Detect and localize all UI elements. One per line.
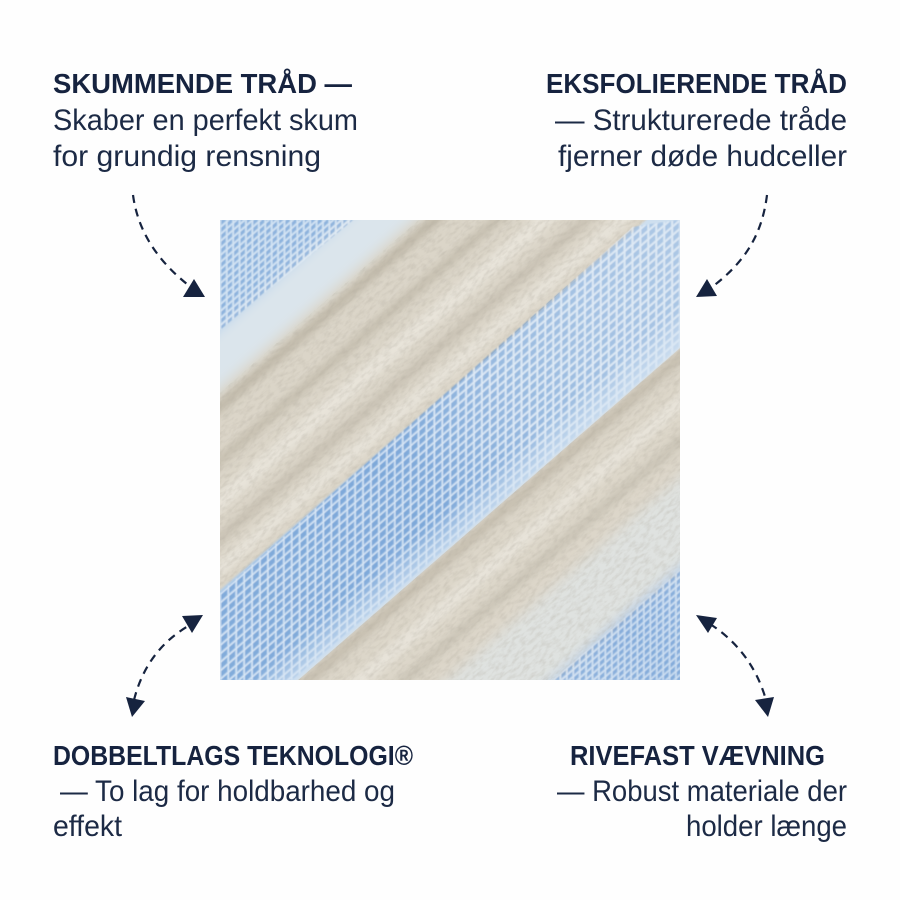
mesh grid: top-left band [220,220,353,330]
heading block: eksfolierende tråd: fjerner døde hudceller [558,140,847,173]
knit texture: lower tan band [299,362,680,680]
fabric close-up photo panel [220,220,680,680]
heading block: skummende tråd: Skaber en perfekt skum [53,104,358,137]
heading block: dobbeltlags teknologi: — To lag for holdbarhed og [60,775,395,808]
heading block: eksfolierende tråd: — Strukturerede tråde [555,104,847,137]
heading block: skummende tråd: for grundig rensning [53,140,321,173]
heading block: dobbeltlags teknologi [53,740,413,843]
arrow: top right [696,195,767,297]
mesh grid: bottom-right band [553,570,680,680]
arrow: bottom left double-headed [126,615,203,717]
pale lower edge of centre mesh [261,318,680,680]
heading block: rivefast vævning [557,740,847,843]
mesh grid: centre band [220,220,680,680]
heading block: dobbeltlags teknologi: DOBBELTLAGS TEKNOLOGI® [53,740,413,771]
arrow: bottom right double-headed [696,615,774,717]
heading block: eksfolierende tråd [546,68,847,173]
heading block: eksfolierende tråd: EKSFOLIERENDE TRÅD [546,68,847,99]
heading block: rivefast vævning: RIVEFAST VÆVNING [570,740,825,771]
arrow: top left [133,195,205,297]
heading block: skummende tråd [53,68,358,173]
knit texture: upper tan band [220,220,642,585]
pale wash over upper-right mesh [468,220,679,450]
heading block: rivefast vævning: holder længe [686,810,847,843]
heading block: rivefast vævning: — Robust materiale der [557,775,847,808]
heading block: dobbeltlags teknologi: effekt [53,810,123,843]
heading block: skummende tråd: SKUMMENDE TRÅD — [53,68,352,99]
centre band base colour [220,220,680,680]
